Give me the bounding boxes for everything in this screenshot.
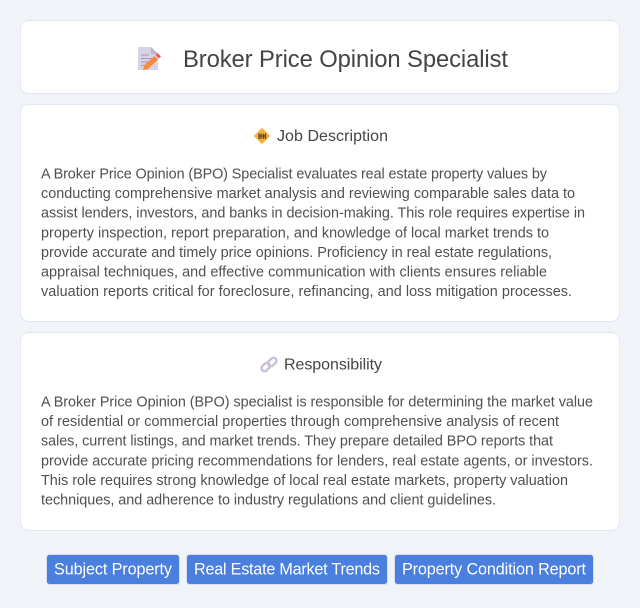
text block: job description body xyxy=(41,166,585,300)
button: real estate market trends: Real Estate Market Trends xyxy=(194,560,380,578)
icon: chain link xyxy=(260,357,278,372)
button: property condition report: Property Condition Report xyxy=(402,560,586,578)
icon: road sign diamond xyxy=(254,128,270,144)
button: real estate market trends xyxy=(186,554,388,584)
text block: responsibility body: of residential or commercial properties through comprehensive analysis of recent xyxy=(41,414,559,430)
text block: responsibility body xyxy=(41,394,593,508)
button: property condition report xyxy=(394,554,594,584)
button: subject property xyxy=(46,554,180,584)
text block: responsibility body: This role requires strong knowledge of local real estate markets, property valuation xyxy=(41,473,568,489)
text block: responsibility body: sales, current listings, and market trends. They prepare detailed BPO reports that xyxy=(41,434,553,450)
text block: job description body: A Broker Price Opinion (BPO) Specialist evaluates real estate property values by xyxy=(41,166,548,182)
text block: job description body: appraisal techniques, and effective communication with clients ensures reliable xyxy=(41,264,547,280)
text block: job description body: conducting comprehensive market analysis and reviewing comparable sales data to xyxy=(41,186,575,202)
heading: job description: Job Description xyxy=(277,128,388,145)
text block: job description body: property inspection, report preparation, and knowledge of local market trends to xyxy=(41,225,549,241)
panel: header xyxy=(20,20,620,94)
text block: responsibility body: A Broker Price Opinion (BPO) specialist is responsible for determining the market value xyxy=(41,394,593,410)
text block: job description body: valuation reports critical for foreclosure, refinancing, and loss mitigation processes. xyxy=(41,284,572,300)
text block: responsibility body: techniques, and adherence to industry regulations and client guidelines. xyxy=(41,492,496,508)
panel: job description xyxy=(20,104,620,322)
text block: job description body: provide accurate and timely price opinions. Proficiency in real estate regulations, xyxy=(41,245,552,261)
heading: responsibility: Responsibility xyxy=(284,356,382,374)
button: subject property: Subject Property xyxy=(54,560,173,578)
text block: job description body: assist lenders, investors, and banks in decision-making. This role requires expertise in xyxy=(41,206,585,222)
tag buttons xyxy=(46,554,594,584)
text block: responsibility body: provide accurate pricing recommendations for lenders, real estate agents, or investors. xyxy=(41,453,593,469)
icon: document with pencil xyxy=(138,47,161,70)
panel: responsibility xyxy=(20,332,620,530)
title: Broker Price Opinion Specialist xyxy=(183,46,508,73)
